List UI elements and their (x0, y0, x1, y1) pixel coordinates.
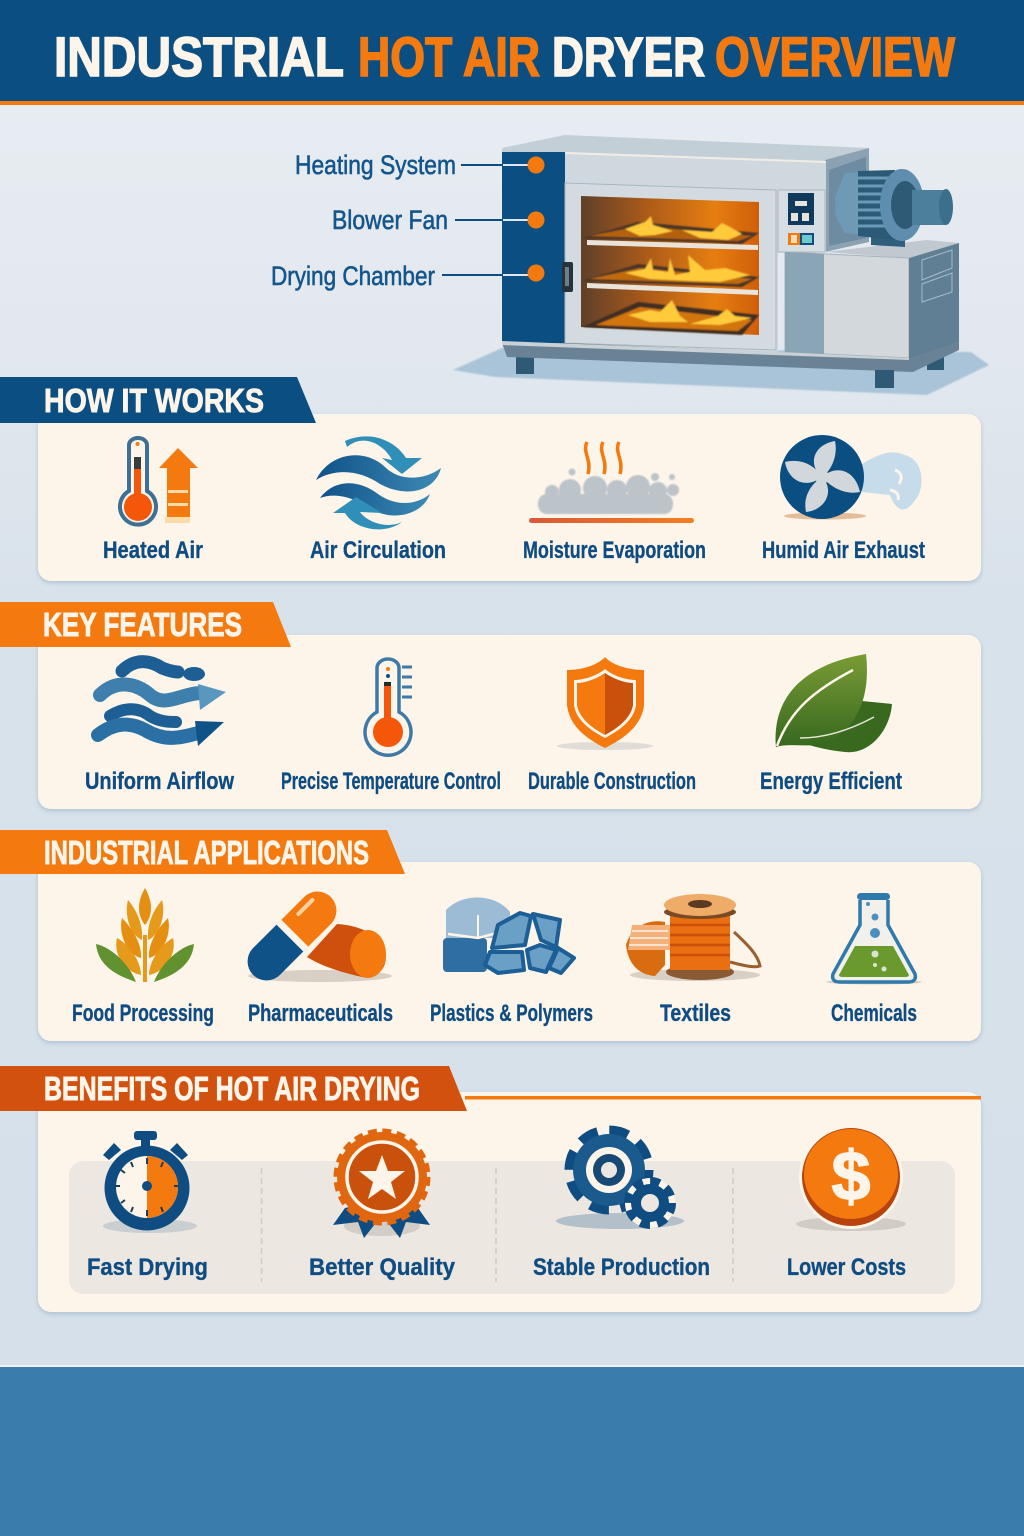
title (54, 25, 955, 88)
icon: chemical flask (826, 893, 922, 984)
label: Energy Efficient: Energy Efficient (760, 768, 902, 795)
icon: green leaves (776, 654, 892, 752)
callout: Heating System: Heating System (295, 150, 456, 180)
icon: quality rosette (333, 1130, 430, 1238)
icon: air circulation waves (316, 436, 441, 529)
heading ribbon: industrial applications (0, 830, 405, 874)
label: Lower Costs: Lower Costs (787, 1254, 906, 1281)
header banner (0, 0, 1024, 105)
heading ribbon: benefits: BENEFITS OF HOT AIR DRYING (44, 1070, 420, 1107)
label: Precise Temperature Control: Precise Temperature Control (281, 768, 501, 795)
label: Fast Drying: Fast Drying (87, 1254, 208, 1281)
label: Textiles: Textiles (660, 1000, 731, 1027)
panel: how it works (0, 377, 981, 581)
heading ribbon: how it works (0, 377, 316, 423)
label: Durable Construction: Durable Construction (528, 768, 696, 795)
panel: benefits of hot air drying (0, 1066, 981, 1312)
icon: capsules (240, 884, 392, 988)
icon: uniform airflow (98, 662, 226, 746)
icon: thermometer with up arrow (120, 438, 198, 525)
label: Better Quality: Better Quality (309, 1254, 456, 1281)
label: Moisture Evaporation: Moisture Evaporation (523, 537, 706, 564)
label: Stable Production: Stable Production (533, 1254, 710, 1281)
label: Chemicals: Chemicals (831, 1000, 917, 1027)
label: Humid Air Exhaust: Humid Air Exhaust (762, 537, 925, 564)
title: INDUSTRIAL (54, 25, 344, 88)
heading ribbon: benefits (0, 1066, 467, 1111)
icon: dollar coin: $ (832, 1137, 870, 1215)
icon: exhaust fan (780, 435, 922, 520)
title: DRYER (552, 25, 705, 88)
icon: moisture evaporation (529, 442, 694, 523)
callout: Blower Fan (332, 205, 544, 235)
callout: Drying Chamber: Drying Chamber (271, 261, 435, 291)
heading ribbon: how it works: HOW IT WORKS (44, 382, 264, 419)
heading ribbon: industrial applications: INDUSTRIAL APPLICATIONS (44, 834, 369, 871)
icon: stopwatch (103, 1131, 197, 1233)
icon: dollar coin (796, 1125, 906, 1231)
label: Uniform Airflow: Uniform Airflow (85, 768, 234, 795)
heading ribbon: key features: KEY FEATURES (43, 606, 242, 643)
icon: thread spool and fabric (626, 894, 760, 981)
label: Pharmaceuticals: Pharmaceuticals (248, 1000, 393, 1027)
icon: precise thermometer (365, 659, 412, 755)
icon: plastic pellets (443, 897, 574, 973)
sub-element: blower motor (835, 169, 953, 247)
icon: gears (556, 1133, 684, 1229)
sub-element: blue and orange capsule (240, 884, 344, 988)
icon: shield (557, 657, 653, 750)
label: Heated Air: Heated Air (103, 537, 203, 564)
panel: industrial applications (0, 830, 981, 1041)
illustration: industrial dryer machine (453, 135, 989, 395)
label: Air Circulation: Air Circulation (310, 537, 446, 564)
icon: wheat (96, 888, 194, 982)
heading ribbon: key features (0, 602, 291, 647)
panel: key features (0, 602, 981, 809)
footer band (0, 1365, 1024, 1536)
title: HOT AIR (358, 25, 540, 88)
label: Plastics & Polymers: Plastics & Polymers (430, 1000, 593, 1027)
title: OVERVIEW (715, 25, 955, 88)
label: Food Processing: Food Processing (72, 1000, 214, 1027)
sub-element: trays and flames in chamber (582, 216, 759, 335)
callout: Blower Fan: Blower Fan (332, 205, 448, 235)
